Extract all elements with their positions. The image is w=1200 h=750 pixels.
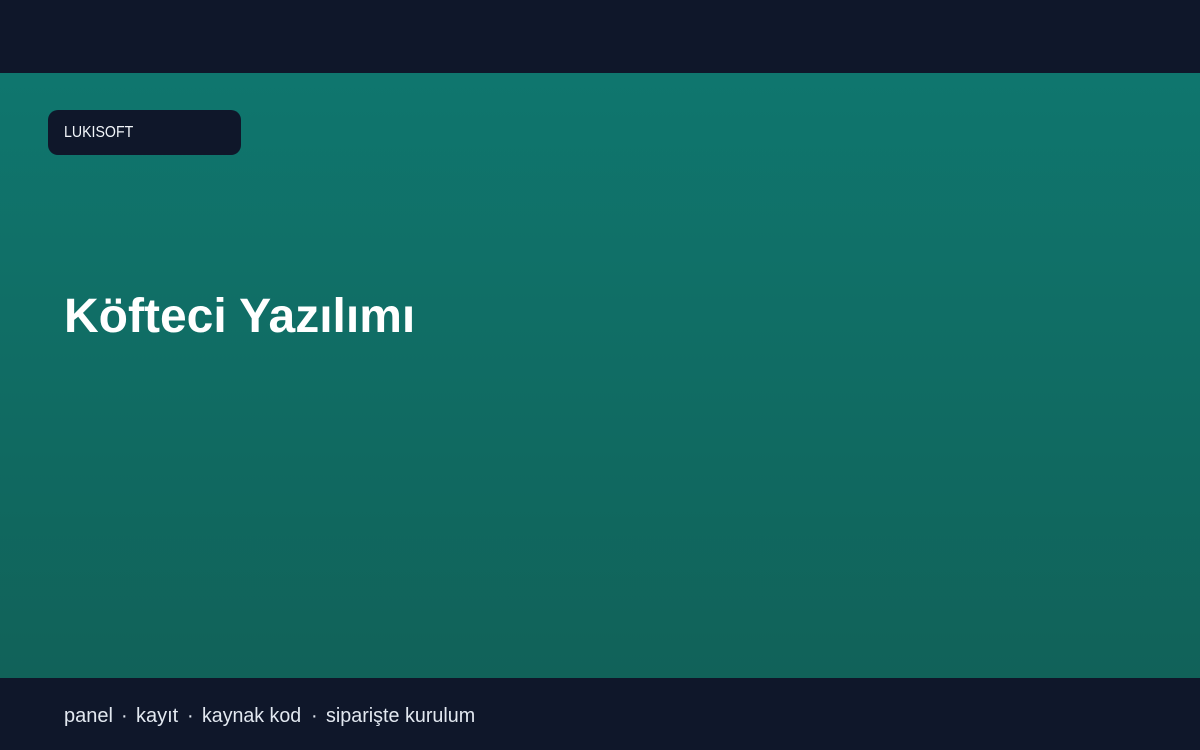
badge: LUKISOFT bbox=[48, 110, 241, 155]
footer bar: panel bbox=[64, 705, 113, 727]
footer bar: kayıt bbox=[136, 705, 178, 727]
badge: LUKISOFT: LUKISOFT bbox=[64, 124, 133, 141]
footer bar: · bbox=[187, 705, 194, 727]
footer bar: siparişte kurulum bbox=[326, 705, 475, 727]
top bar bbox=[0, 0, 1200, 73]
footer bar: · bbox=[311, 705, 318, 727]
footer bar bbox=[0, 678, 1200, 750]
title: Köfteci Yazılımı bbox=[64, 290, 415, 343]
footer bar: · bbox=[121, 705, 128, 727]
footer bar: kaynak kod bbox=[202, 705, 301, 727]
